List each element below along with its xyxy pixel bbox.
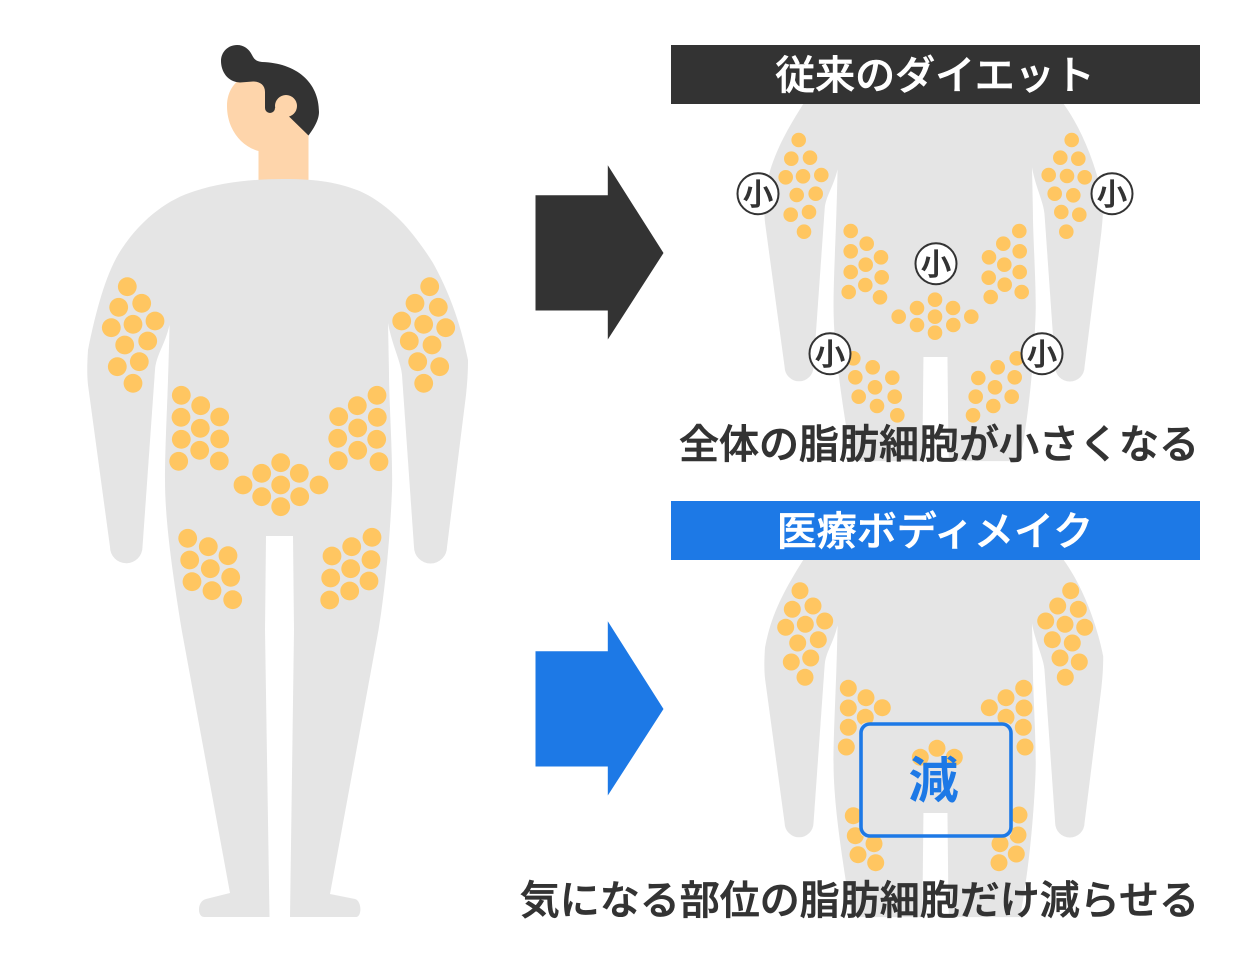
badge: small, left arm: 小 xyxy=(743,179,773,212)
body silhouette xyxy=(87,179,468,917)
badge: small, right thigh: 小 xyxy=(1027,339,1057,372)
badge: small, right thigh xyxy=(1022,333,1062,374)
head and face xyxy=(227,76,308,181)
badge: small, left thigh: 小 xyxy=(815,339,845,372)
ear xyxy=(275,95,297,117)
badge: small, left thigh xyxy=(810,333,850,374)
treated area box with reduce label: 減 xyxy=(908,753,958,809)
badge: small, right arm: 小 xyxy=(1097,179,1127,212)
heading bar: conventional diet xyxy=(671,45,1200,104)
treated area box with reduce label xyxy=(861,724,1011,836)
arrow: dark xyxy=(536,165,664,340)
badge: small, left arm xyxy=(738,173,778,214)
fat cells: inside treated area xyxy=(912,740,963,766)
heading bar: medical body make xyxy=(671,501,1200,560)
body silhouette: conventional diet xyxy=(764,104,1103,461)
fat cells: outside treated area xyxy=(777,582,1093,871)
badge: small, belly xyxy=(916,243,956,284)
body silhouette: medical body make xyxy=(764,560,1103,917)
caption: conventional diet: 全体の脂肪細胞が小さくなる xyxy=(679,423,1199,467)
fat cells: shrunken xyxy=(778,133,1092,423)
hair xyxy=(221,45,319,136)
fat cells: main figure xyxy=(102,277,455,609)
badge: small, belly: 小 xyxy=(921,249,951,282)
panel: medical body make figure xyxy=(764,560,1103,917)
figure: full body with fat cells xyxy=(87,45,468,917)
panel: conventional diet figure xyxy=(738,104,1132,461)
arrow: blue xyxy=(536,621,664,796)
heading bar: conventional diet: 従来のダイエット xyxy=(775,54,1095,98)
caption: medical body make: 気になる部位の脂肪細胞だけ減らせる xyxy=(520,879,1199,923)
badge: small, right arm xyxy=(1092,173,1132,214)
heading bar: medical body make: 医療ボディメイク xyxy=(777,510,1093,554)
